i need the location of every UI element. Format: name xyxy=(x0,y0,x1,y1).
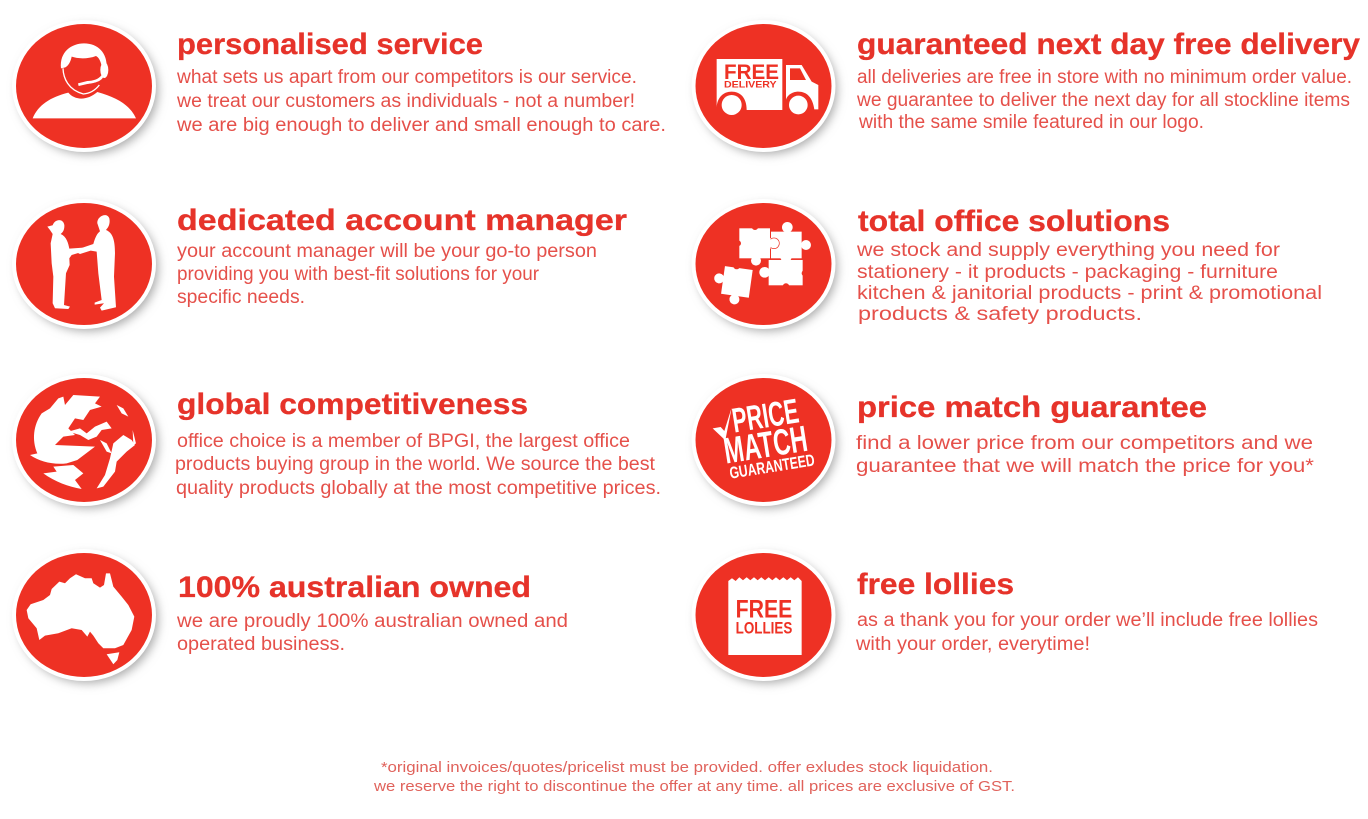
panel: free lollies xyxy=(692,549,1318,683)
heading: 100% australian owned xyxy=(178,571,531,604)
body text: providing you with best-fit solutions for your xyxy=(177,264,540,285)
heading: global competitiveness xyxy=(177,388,528,421)
body text: we guarantee to deliver the next day for all stockline items xyxy=(856,90,1350,111)
icon: globe with paper plane xyxy=(30,395,136,489)
body text xyxy=(176,611,568,655)
icon: price match guaranteed stamp xyxy=(713,391,816,483)
panel: price match guarantee xyxy=(692,374,1315,508)
body text: we are big enough to deliver and small enough to care. xyxy=(176,115,666,136)
icon: price match guaranteed stamp: GUARANTEED xyxy=(728,450,816,483)
icon: delivery truck: DELIVERY xyxy=(724,79,778,89)
panel: personalised service xyxy=(12,20,666,154)
body text xyxy=(856,240,1322,325)
body text xyxy=(856,433,1315,477)
icon: jigsaw puzzle pieces xyxy=(711,222,811,306)
body text: with the same smile featured in our logo. xyxy=(858,112,1204,133)
badge: free lollies xyxy=(692,549,837,683)
heading: price match guarantee xyxy=(857,391,1207,424)
panel: total office solutions xyxy=(692,199,1322,331)
body text: as a thank you for your order we’ll include free lollies xyxy=(857,610,1318,631)
heading: free lollies xyxy=(857,568,1014,601)
footnote: we reserve the right to discontinue the offer at any time. all prices are exclusive of GST. xyxy=(373,778,1015,795)
body text xyxy=(176,67,666,136)
heading: guaranteed next day free delivery xyxy=(857,28,1360,61)
body text: what sets us apart from our competitors is our service. xyxy=(176,67,637,88)
body text xyxy=(855,610,1318,655)
body text: stationery - it products - packaging - furniture xyxy=(857,262,1278,283)
panel: guaranteed next day free delivery xyxy=(692,20,1360,154)
body text: with your order, everytime! xyxy=(855,634,1090,655)
body text: all deliveries are free in store with no minimum order value. xyxy=(857,67,1352,88)
body text: we treat our customers as individuals - not a number! xyxy=(176,91,635,112)
heading: total office solutions xyxy=(858,205,1170,238)
body text: operated business. xyxy=(177,634,345,655)
icon: map of Australia xyxy=(27,573,134,664)
badge: price match guaranteed xyxy=(692,374,837,508)
body text xyxy=(177,241,597,308)
badge: personalised service xyxy=(12,20,158,154)
icon: price match guaranteed stamp: PRICE xyxy=(730,393,801,440)
panel: 100% australian owned xyxy=(12,549,568,683)
icon: lolly bag: FREE xyxy=(736,597,792,624)
body text: products & safety products. xyxy=(858,304,1142,325)
body text xyxy=(175,431,661,499)
body text: guarantee that we will match the price for you* xyxy=(856,456,1315,477)
heading: personalised service xyxy=(177,28,483,61)
body text: office choice is a member of BPGI, the largest office xyxy=(177,431,630,452)
icon: delivery truck xyxy=(717,59,818,115)
icon: lolly bag xyxy=(728,577,802,655)
icon: price match guaranteed stamp: MATCH xyxy=(721,418,810,471)
body text: quality products globally at the most competitive prices. xyxy=(176,478,661,499)
icon: customer service agent with headset xyxy=(33,43,136,118)
footnote xyxy=(373,759,1015,795)
body text: kitchen & janitorial products - print & promotional xyxy=(857,283,1322,304)
panel: global competitiveness xyxy=(12,374,661,508)
badge: free delivery xyxy=(692,20,837,154)
body text: we are proudly 100% australian owned and xyxy=(176,611,568,632)
body text: we stock and supply everything you need for xyxy=(856,240,1281,261)
heading: dedicated account manager xyxy=(177,204,627,237)
badge: total office solutions xyxy=(692,199,837,331)
badge: global competitiveness xyxy=(12,374,158,508)
icon: delivery truck: FREE xyxy=(724,59,779,84)
body text: your account manager will be your go-to person xyxy=(177,241,597,262)
body text: products buying group in the world. We source the best xyxy=(175,454,656,475)
icon: two people shaking hands xyxy=(47,215,116,311)
badge: 100% australian owned xyxy=(12,549,158,683)
badge: dedicated account manager xyxy=(12,199,158,331)
footnote: *original invoices/quotes/pricelist must be provided. offer exludes stock liquidation. xyxy=(381,759,993,776)
body text xyxy=(856,67,1352,133)
icon: lolly bag: LOLLIES xyxy=(736,619,792,638)
body text: find a lower price from our competitors and we xyxy=(856,433,1313,454)
panel: dedicated account manager xyxy=(12,199,627,331)
body text: specific needs. xyxy=(177,287,305,308)
